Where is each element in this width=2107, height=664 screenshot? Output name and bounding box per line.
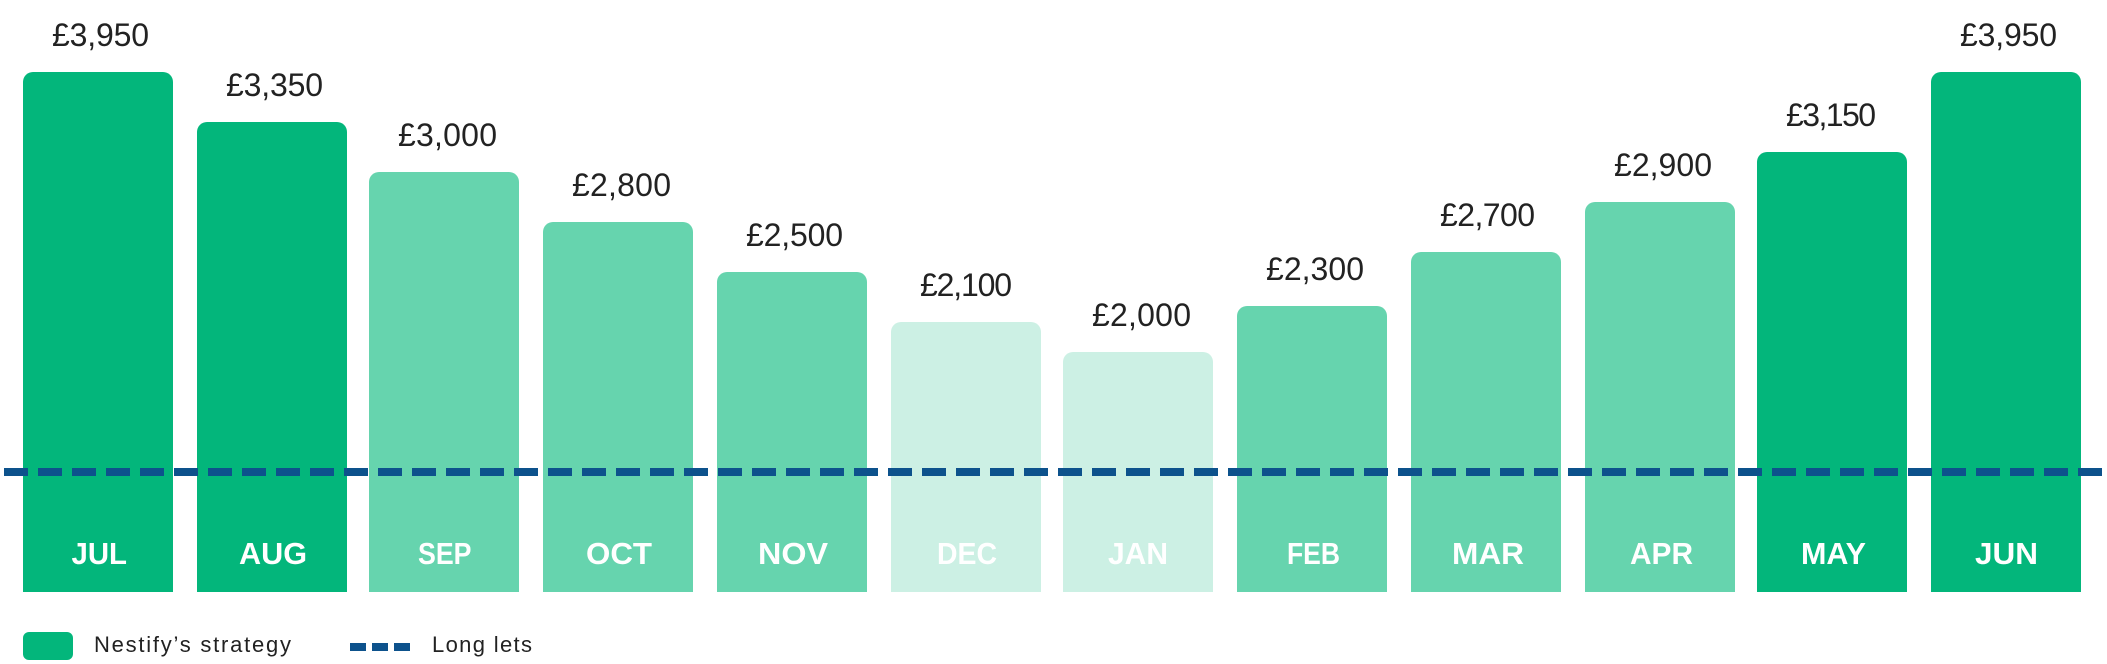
bar: May £3,150: MAY [1801,536,1866,571]
legend item: Long lets [350,632,532,657]
bar: July £3,950 [23,17,173,592]
bar: June £3,950: £3,950 [1960,17,2057,53]
bar: December £2,100: DEC [937,536,997,571]
bar: June £3,950: JUN [1975,536,2038,571]
bar: March £2,700 [1411,197,1561,592]
bar: October £2,800 [543,167,693,592]
bar: March £2,700: £2,700 [1440,197,1535,233]
bar: September £3,000 [369,117,519,592]
bar: June £3,950 [1931,17,2081,592]
bar: July £3,950: £3,950 [52,17,149,53]
bar: January £2,000: £2,000 [1092,297,1191,333]
legend item: Nestify's strategy [23,632,291,660]
bar: October £2,800: OCT [586,536,652,571]
legend item: Nestify's strategy: Nestify’s strategy [94,632,291,657]
bar: November £2,500: NOV [758,536,828,571]
bar: November £2,500 [717,217,867,592]
bar: May £3,150 [1757,97,1907,592]
bar: February £2,300 [1237,251,1387,592]
bar: December £2,100 [891,267,1041,592]
bar: March £2,700: MAR [1452,536,1524,571]
bar: July £3,950: JUL [72,536,127,571]
bar: August £3,350: £3,350 [226,67,323,103]
bar: April £2,900: £2,900 [1614,147,1712,183]
bar: October £2,800: £2,800 [572,167,671,203]
bar: February £2,300: £2,300 [1266,251,1364,287]
bar: April £2,900: APR [1630,536,1693,571]
bar: December £2,100: £2,100 [920,267,1012,303]
legend [23,632,532,660]
legend item: Long lets: Long lets [432,632,532,657]
bar: May £3,150: £3,150 [1786,97,1876,133]
dashed line: long lets level [4,468,2102,476]
bar: September £3,000: £3,000 [398,117,497,153]
bar: August £3,350 [197,67,347,592]
bar: September £3,000: SEP [418,536,472,571]
bar: January £2,000: JAN [1108,536,1168,571]
bar: August £3,350: AUG [239,536,307,571]
bar: November £2,500: £2,500 [746,217,843,253]
bar: January £2,000 [1063,297,1213,592]
bar: February £2,300: FEB [1287,536,1340,571]
bar: April £2,900 [1585,147,1735,592]
